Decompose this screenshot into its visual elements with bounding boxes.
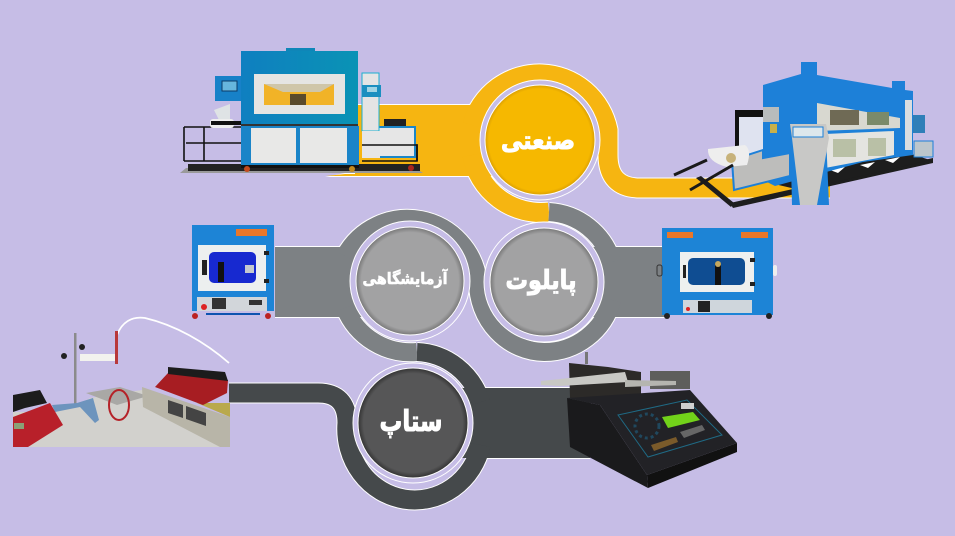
machine: pilot cabinet [657, 228, 777, 319]
machine: industrial perspective view [674, 62, 933, 208]
photo: electrospinning bench setup [13, 318, 230, 447]
circle: laboratory: آزمایشگاهی [362, 268, 448, 288]
circle: setup: ستاپ [380, 404, 442, 438]
machine: syringe pump [541, 352, 737, 488]
circle: industrial [480, 80, 600, 200]
circle: industrial: صنعتی [501, 126, 575, 155]
ribbon: setup dark [229, 352, 590, 500]
circle: pilot [484, 222, 604, 342]
circle: pilot: پایلوت [506, 266, 576, 296]
ribbon: lab and pilot gray [275, 212, 665, 352]
machine: industrial front view [180, 48, 423, 173]
machine: laboratory cabinet [192, 225, 274, 319]
circle: laboratory [350, 221, 470, 341]
circle: setup [353, 363, 473, 483]
ribbon: industrial yellow [325, 74, 830, 212]
